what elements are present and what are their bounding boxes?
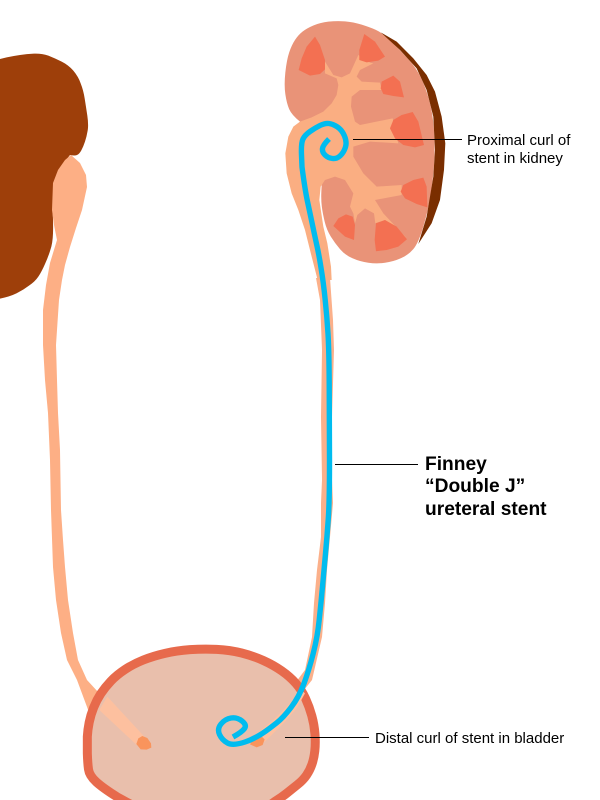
label: stent name: Finney bbox=[425, 454, 487, 474]
bladder bbox=[87, 649, 315, 800]
label: distal curl: Distal curl of stent in bladder bbox=[375, 730, 564, 747]
stent bbox=[219, 123, 346, 744]
kidney outer capsule bbox=[381, 32, 445, 244]
label: stent name bbox=[425, 454, 547, 520]
renal pelvis bbox=[285, 55, 407, 280]
right kidney bbox=[285, 21, 445, 280]
label: proximal curl: stent in kidney bbox=[467, 150, 563, 167]
label: stent name: ureteral stent bbox=[425, 499, 547, 520]
left ureter in bladder bbox=[99, 697, 145, 745]
label: proximal curl: Proximal curl of bbox=[467, 132, 570, 149]
left ureter bbox=[43, 155, 110, 715]
bladder wall and lumen bbox=[87, 649, 315, 800]
right ureter bbox=[290, 278, 334, 700]
kidney cortex bbox=[285, 21, 435, 263]
pointer lines bbox=[285, 140, 462, 738]
right ureter in bladder bbox=[253, 688, 305, 742]
label: stent name: “Double J” bbox=[425, 476, 525, 497]
left kidney bbox=[0, 54, 88, 299]
papillae bbox=[299, 34, 427, 251]
right ureteral orifice bbox=[250, 734, 265, 747]
label: proximal curl bbox=[467, 132, 570, 167]
left ureteral orifice bbox=[136, 736, 151, 750]
